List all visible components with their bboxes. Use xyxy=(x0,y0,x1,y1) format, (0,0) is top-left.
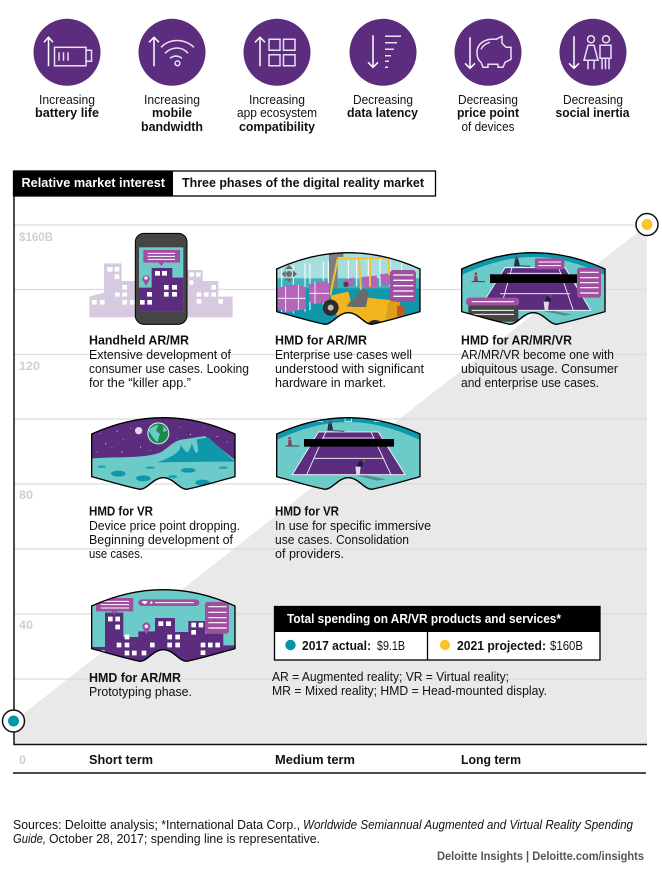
sources note: Guide, xyxy=(13,832,46,846)
icon captions xyxy=(35,93,630,134)
text block: HMD for AR/MR enterprise: understood with significant xyxy=(275,362,424,376)
caption: data latency xyxy=(347,93,418,120)
text block: HMD for VR price point: Beginning development of xyxy=(89,533,233,547)
text block: HMD for AR/MR/VR: and enterprise use cases. xyxy=(461,376,599,390)
caption: price point: of devices xyxy=(462,120,514,134)
legend: total spending xyxy=(274,606,600,660)
sources note: Worldwide Semiannual Augmented and Virtual Reality Spending xyxy=(303,818,633,832)
caption: social inertia xyxy=(556,93,630,120)
x-axis labels: Medium term xyxy=(275,753,355,767)
y-axis labels: 40 xyxy=(19,618,33,632)
text block: HMD for AR/MR prototyping: Prototyping phase. xyxy=(89,685,192,699)
caption: social inertia: social inertia xyxy=(556,106,630,120)
heading bar: Relative market interest xyxy=(22,176,166,190)
marker: 2021 projected xyxy=(636,214,658,236)
legend: total spending: $9.1B xyxy=(377,639,405,653)
heading bar: Three phases of the digital reality market xyxy=(182,176,425,190)
text block: HMD for VR price point: Device price point dropping. xyxy=(89,519,240,533)
caption: mobile bandwidth: mobile xyxy=(152,106,192,120)
text block: HMD for AR/MR/VR: ubiquitous usage. Consumer xyxy=(461,362,619,376)
legend: total spending: Total spending on AR/VR products and services* xyxy=(287,612,561,626)
text block: HMD for VR immersive: HMD for VR xyxy=(275,504,339,518)
heading bar xyxy=(13,170,436,196)
text block: HMD for VR price point: HMD for VR xyxy=(89,504,153,518)
illustration: forklift goggles xyxy=(276,252,421,325)
text block: HMD for AR/MR/VR xyxy=(461,334,619,390)
text block: HMD for VR price point xyxy=(89,504,240,561)
y-axis labels: 80 xyxy=(19,488,33,502)
text block: Handheld AR/MR: Handheld AR/MR xyxy=(89,334,189,348)
text block: HMD for AR/MR prototyping xyxy=(89,671,192,699)
sources note: Sources: Deloitte analysis; *International Data Corp., xyxy=(13,818,300,832)
caption: app ecosystem compatibility: app ecosystem xyxy=(237,106,317,120)
caption: social inertia: Decreasing xyxy=(563,93,623,107)
icon: mobile bandwidth xyxy=(138,19,206,86)
text block: Handheld AR/MR: Extensive development of xyxy=(89,348,231,362)
illustration: AR/MR/VR tennis goggles xyxy=(461,252,606,325)
marker: 2017 actual xyxy=(2,710,24,732)
caption: battery life: battery life xyxy=(35,106,99,120)
text block: HMD for AR/MR/VR: HMD for AR/MR/VR xyxy=(461,334,572,348)
y-axis labels xyxy=(19,230,53,767)
icon: battery life xyxy=(34,19,100,86)
text block: HMD for AR/MR/VR: AR/MR/VR become one with xyxy=(461,348,614,362)
text block: HMD for VR price point: use cases. xyxy=(89,547,143,561)
sources note xyxy=(13,818,633,846)
legend: total spending: $160B xyxy=(550,639,583,653)
abbreviations note: MR = Mixed reality; HMD = Head-mounted display. xyxy=(272,684,547,698)
caption: data latency: Decreasing xyxy=(353,93,413,107)
legend: total spending: 2021 projected: xyxy=(457,639,546,653)
text block: HMD for AR/MR enterprise: HMD for AR/MR xyxy=(275,334,367,348)
caption: battery life: Increasing xyxy=(39,93,95,107)
text block: HMD for VR immersive: use cases. Consolidation xyxy=(275,533,409,547)
y-axis labels: 0 xyxy=(19,753,26,767)
abbreviations note xyxy=(272,670,547,698)
x-axis labels: Long term xyxy=(461,753,521,767)
abbreviations note: AR = Augmented reality; VR = Virtual reality; xyxy=(272,670,509,684)
text block: HMD for AR/MR enterprise xyxy=(275,334,424,390)
caption: price point: Decreasing xyxy=(458,93,518,107)
caption: app ecosystem compatibility: Increasing xyxy=(249,93,305,107)
caption: mobile bandwidth: Increasing xyxy=(144,93,200,107)
legend: total spending: 2017 actual: xyxy=(302,639,371,653)
caption: battery life xyxy=(35,93,99,120)
text block: Handheld AR/MR: for the “killer app.” xyxy=(89,376,191,390)
text block: HMD for VR immersive xyxy=(275,504,431,561)
illustration: VR moon goggles xyxy=(91,417,236,490)
icon: app ecosystem compatibility xyxy=(244,19,310,86)
caption: mobile bandwidth: bandwidth xyxy=(141,120,203,134)
text block: HMD for VR immersive: of providers. xyxy=(275,547,344,561)
illustration: VR tennis goggles xyxy=(276,417,421,490)
caption: data latency: data latency xyxy=(347,106,418,120)
y-axis labels: 120 xyxy=(19,359,40,373)
icon: data latency xyxy=(350,19,416,86)
caption: price point: price point xyxy=(457,106,520,120)
x-axis labels xyxy=(89,753,521,767)
illustration: handheld phone and city xyxy=(89,233,233,324)
text block: HMD for AR/MR enterprise: hardware in market. xyxy=(275,376,386,390)
caption: price point xyxy=(457,93,520,134)
sources note: October 28, 2017; spending line is representative. xyxy=(49,832,320,846)
text block: HMD for VR immersive: In use for specific immersive xyxy=(275,519,431,533)
text block: HMD for AR/MR prototyping: HMD for AR/MR xyxy=(89,671,181,685)
credit line: Deloitte Insights | Deloitte.com/insights xyxy=(437,851,644,863)
text block: HMD for AR/MR enterprise: Enterprise use cases well xyxy=(275,348,412,362)
caption: mobile bandwidth xyxy=(141,93,203,134)
text block: Handheld AR/MR: consumer use cases. Looking xyxy=(89,362,249,376)
x-axis labels: Short term xyxy=(89,753,153,767)
illustration: prototyping city goggles xyxy=(91,589,236,662)
chart: spending area xyxy=(13,196,647,773)
icon: price point xyxy=(454,19,522,86)
y-axis labels: $160B xyxy=(19,230,53,244)
caption: app ecosystem compatibility xyxy=(237,93,317,134)
icon: social inertia xyxy=(560,19,626,86)
text block: Handheld AR/MR xyxy=(89,334,249,390)
icon row: technology drivers xyxy=(34,19,626,86)
caption: app ecosystem compatibility: compatibility xyxy=(239,120,315,134)
